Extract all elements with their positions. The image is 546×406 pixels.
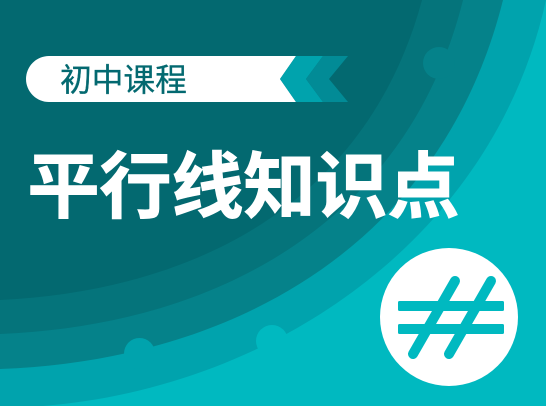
label pill <box>26 56 296 102</box>
icon: parallel symbol badge <box>380 248 518 386</box>
label text: 初中课程 <box>60 62 187 98</box>
chevron arrows <box>280 56 348 102</box>
title: 平行线知识点 <box>28 148 460 228</box>
